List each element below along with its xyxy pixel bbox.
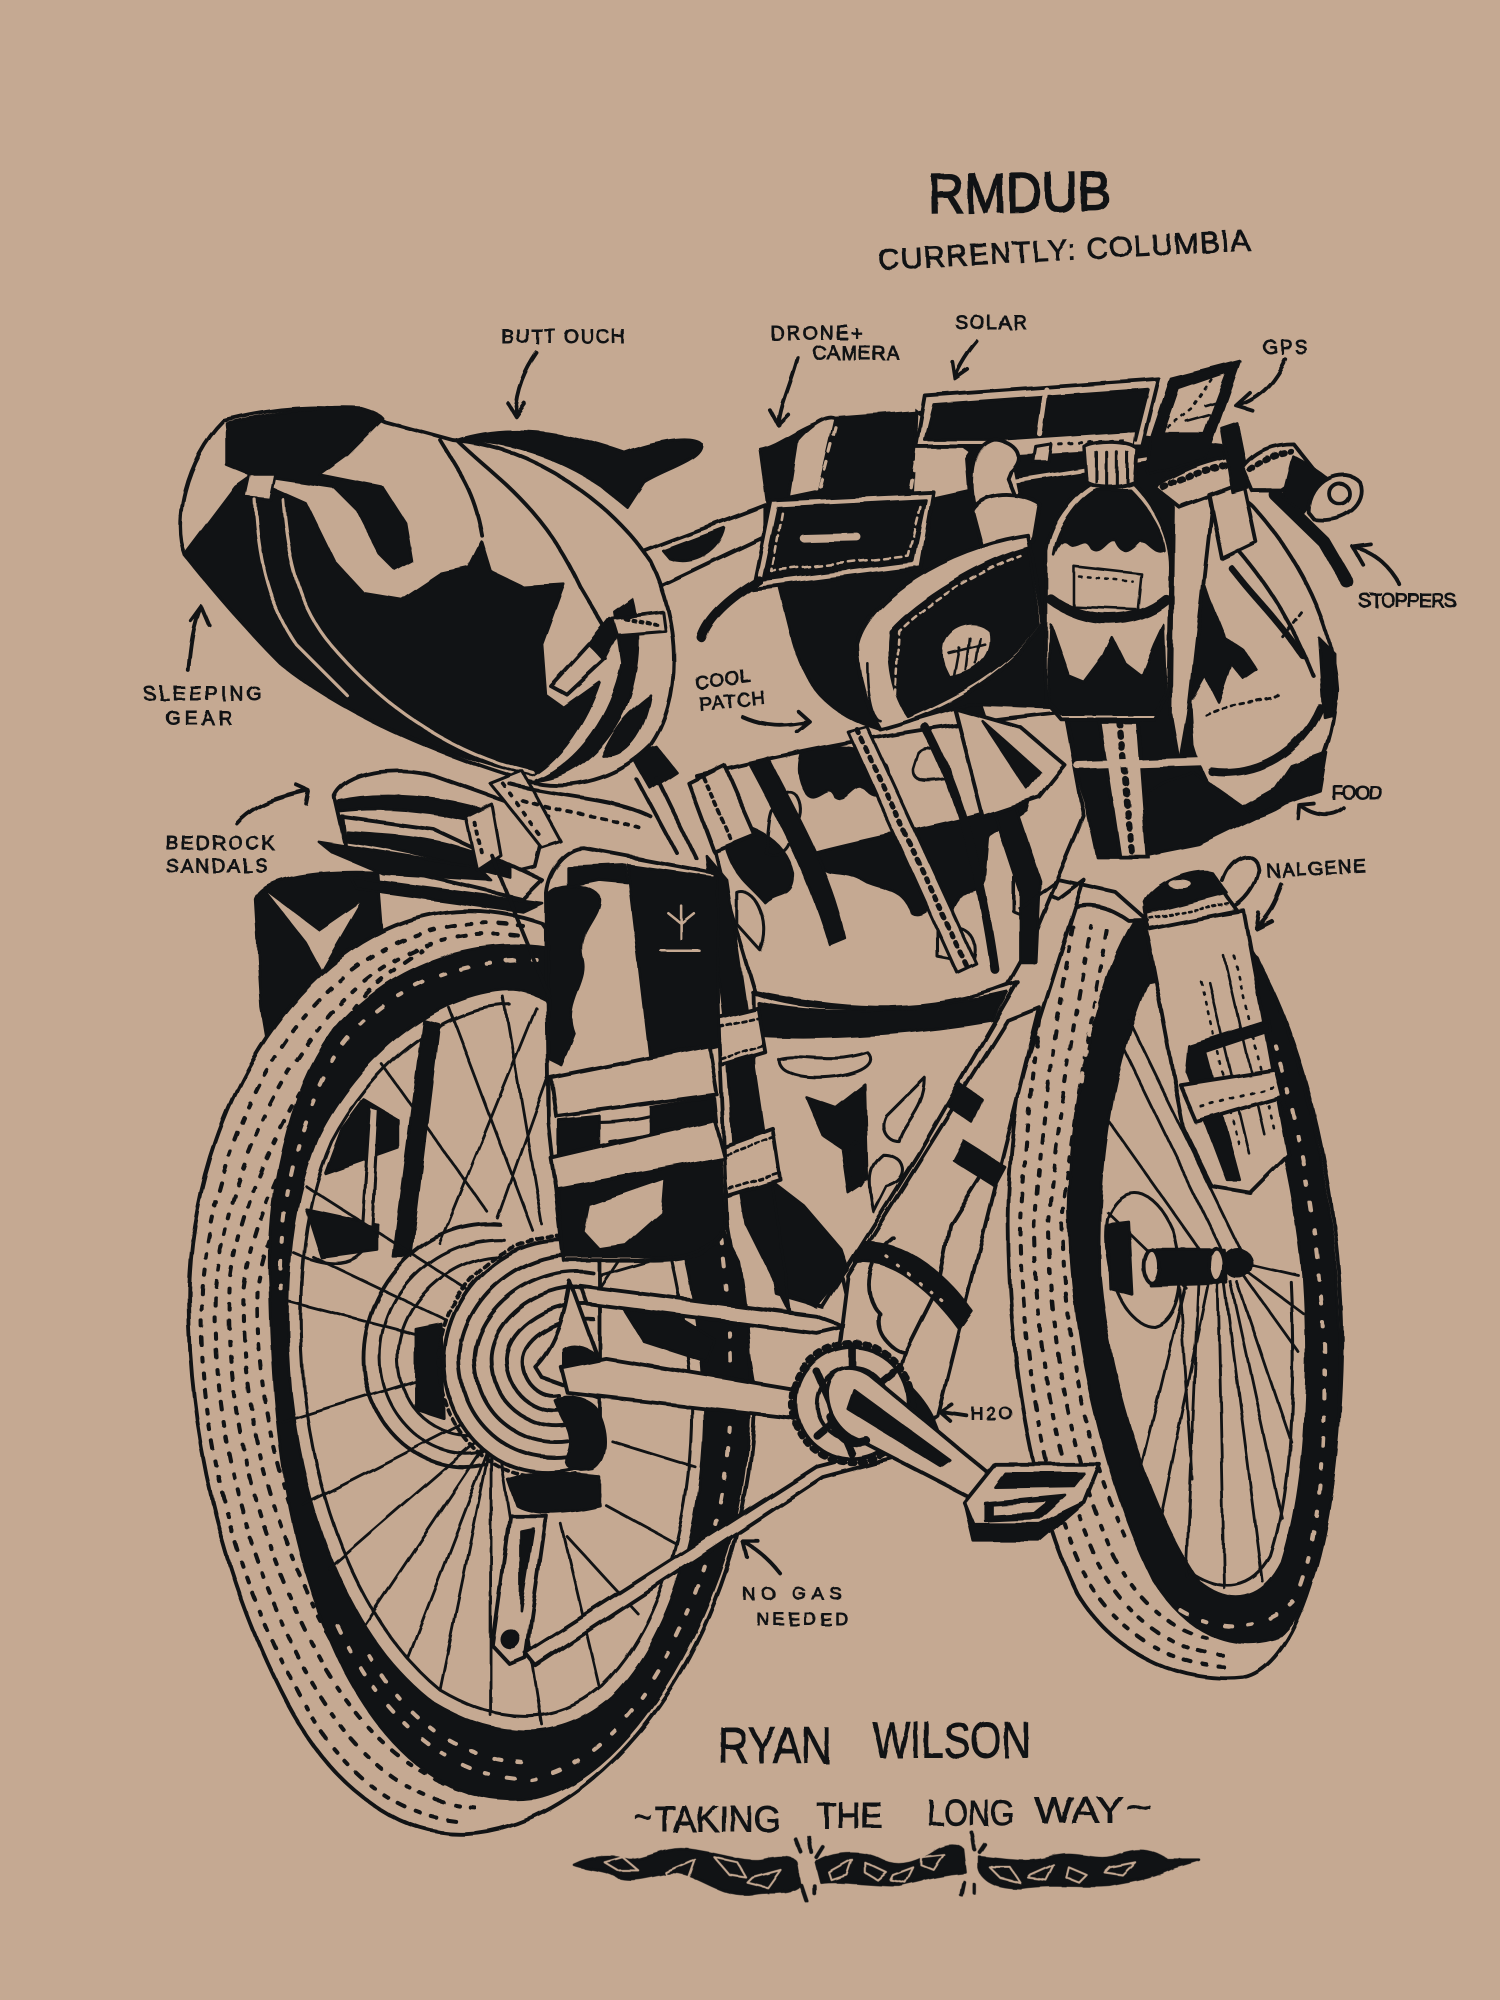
seat post and stays [631, 747, 791, 1314]
arrow: solar [953, 342, 977, 379]
label: gps: GPS [1263, 337, 1307, 358]
tree patch pouch [857, 536, 1043, 730]
camo blobs [548, 886, 599, 1065]
label: no gas needed [742, 1583, 848, 1629]
label: cool patch: PATCH [698, 688, 766, 716]
bottom [559, 1158, 724, 1258]
title: RMDUB [928, 159, 1112, 225]
bag side black [536, 599, 638, 781]
rear tire black ring [270, 945, 751, 1800]
seat post stem behind bag [644, 505, 765, 589]
arrow: stoppers [1352, 543, 1399, 584]
name: RYAN [718, 1717, 832, 1774]
front rotor and hub [1106, 1193, 1251, 1327]
lower chain [526, 1444, 908, 1666]
main black area [185, 478, 599, 776]
snake segment one [574, 1849, 800, 1895]
chainring [792, 1343, 912, 1463]
left strap [702, 580, 759, 638]
arrow: h2o [940, 1404, 967, 1421]
tagline: ~ [634, 1797, 652, 1837]
arrow: nalgene [1256, 885, 1282, 929]
label: sleeping gear: SLEEPING [143, 684, 261, 705]
label: sleeping gear: GEAR [166, 708, 232, 729]
front wheel [1008, 856, 1342, 1678]
fork dry bag [546, 848, 727, 1261]
bag strap lines [255, 500, 533, 773]
pedal and crank [792, 1343, 1099, 1541]
food bag [1186, 496, 1337, 816]
label: cool patch [694, 666, 766, 716]
tagline: WAY [1034, 1791, 1124, 1831]
black stripe [628, 865, 719, 1061]
top-bar loop bag [972, 440, 1020, 510]
middle section [559, 1116, 599, 1154]
snake segment three [980, 1851, 1199, 1888]
GPS [1148, 361, 1240, 474]
label: no gas needed: NEEDED [756, 1609, 848, 1629]
rear derailleur [508, 1282, 714, 1512]
down tube [842, 880, 1084, 1422]
arrow: sleeping gear [189, 607, 209, 671]
rim line [300, 1005, 692, 1716]
light strap over frame [925, 727, 995, 969]
water bottle [1046, 442, 1202, 857]
label: drone + camera [770, 323, 899, 365]
arrows [189, 342, 1399, 1574]
bedrock sandals [319, 771, 695, 995]
label: butt ouch: BUTT OUCH [501, 327, 625, 348]
roll light section right [912, 411, 1020, 504]
handlebar grip [1154, 423, 1361, 582]
chainstay [561, 1358, 797, 1418]
name: WILSON [872, 1712, 1031, 1769]
top black patch [227, 408, 412, 570]
label: bedrock sandals [166, 833, 274, 877]
black ring highlights [280, 960, 731, 1779]
rack bag behind spokes [293, 1020, 439, 1263]
label: drone + camera: DRONE+ [770, 323, 862, 344]
text labels [143, 159, 1457, 1840]
black strap [750, 758, 844, 944]
label: bedrock sandals: BEDROCK [166, 833, 274, 854]
strap two [551, 1120, 724, 1189]
saddle [457, 431, 702, 508]
seat bag [180, 408, 765, 785]
camo patches [721, 747, 1037, 963]
top tube roll bag [689, 702, 1084, 1008]
side strap by bottle [1171, 495, 1212, 765]
front ring highlights [1080, 938, 1324, 1626]
mini logo [661, 906, 699, 950]
main black mass [760, 411, 1224, 857]
buckle [551, 644, 606, 695]
rear rack pannier [255, 872, 383, 1061]
arrow: no gas [742, 1541, 781, 1574]
snake ornament [574, 1833, 1199, 1901]
arrow: gps [1236, 360, 1286, 411]
ladder strap [848, 727, 976, 972]
frame joint near head tube [1020, 880, 1148, 921]
label: h2o: H2O [971, 1404, 1013, 1424]
snake segment two [816, 1846, 966, 1885]
chain upper [580, 1286, 844, 1333]
small bottle holder [972, 495, 1040, 548]
arrow: food [1298, 804, 1344, 819]
water bladder on frame [835, 1008, 1040, 1448]
nalgene bottle [1145, 856, 1288, 1193]
label: sleeping gear [143, 684, 261, 729]
bag zipper band [758, 992, 1008, 1037]
flap pocket [753, 492, 934, 589]
label: cool patch: COOL [694, 666, 752, 695]
front spokes [1107, 1020, 1304, 1588]
tagline: LONG [927, 1793, 1014, 1833]
lower food bag block [1135, 772, 1256, 857]
label: bedrock sandals: SANDALS [166, 856, 268, 877]
label: stoppers: STOPPERS [1358, 591, 1457, 612]
small pouch below [954, 708, 1065, 816]
cassette [439, 1236, 599, 1478]
roll light section left [788, 417, 835, 497]
snake sparks [796, 1833, 985, 1901]
rear tire tread [201, 923, 523, 1821]
strap one [551, 1046, 717, 1116]
name [718, 1712, 1031, 1774]
label: nalgene: NALGENE [1266, 856, 1367, 882]
black strap right [959, 702, 1040, 963]
arrow: cool patch [742, 712, 810, 732]
rear spokes [283, 997, 708, 1724]
label: solar: SOLAR [955, 313, 1027, 334]
front tire tread [1020, 918, 1231, 1667]
front rim line [1189, 1282, 1293, 1586]
arrow: bedrock [237, 786, 309, 824]
bicycle illustration [180, 342, 1399, 1834]
label: drone + camera: CAMERA [812, 344, 899, 365]
arrow: butt ouch [508, 353, 537, 416]
handlebar roll and main bags [702, 361, 1361, 969]
stopper lever [1276, 495, 1347, 582]
bag camo [770, 1052, 925, 1307]
rear crank arm [492, 1515, 546, 1665]
label: food: FOOD [1332, 784, 1383, 805]
tagline: TAKING [654, 1800, 781, 1840]
tagline: THE [816, 1796, 883, 1836]
arrow: drone [770, 357, 797, 425]
crank arm [827, 1368, 989, 1499]
label: no gas needed: NO GAS [742, 1583, 842, 1603]
bag fold curve [457, 440, 605, 628]
front tire black ring [1069, 918, 1339, 1643]
solar panel [916, 379, 1158, 482]
roll strap end [689, 765, 755, 852]
tagline [634, 1788, 1152, 1840]
dry bag outline [180, 408, 674, 785]
location: CURRENTLY: COLUMBIA [877, 224, 1251, 277]
pedal [964, 1464, 1099, 1541]
front tire [1008, 905, 1342, 1678]
tagline: ~ [1126, 1788, 1152, 1828]
frame [835, 880, 1084, 1448]
bottle cage ladder [1099, 722, 1148, 857]
frame triangle bag [753, 982, 1018, 1307]
rear wheel [189, 911, 908, 1834]
disc rotor [364, 1224, 504, 1467]
cinch knot [245, 474, 276, 500]
rear tire [189, 911, 755, 1834]
